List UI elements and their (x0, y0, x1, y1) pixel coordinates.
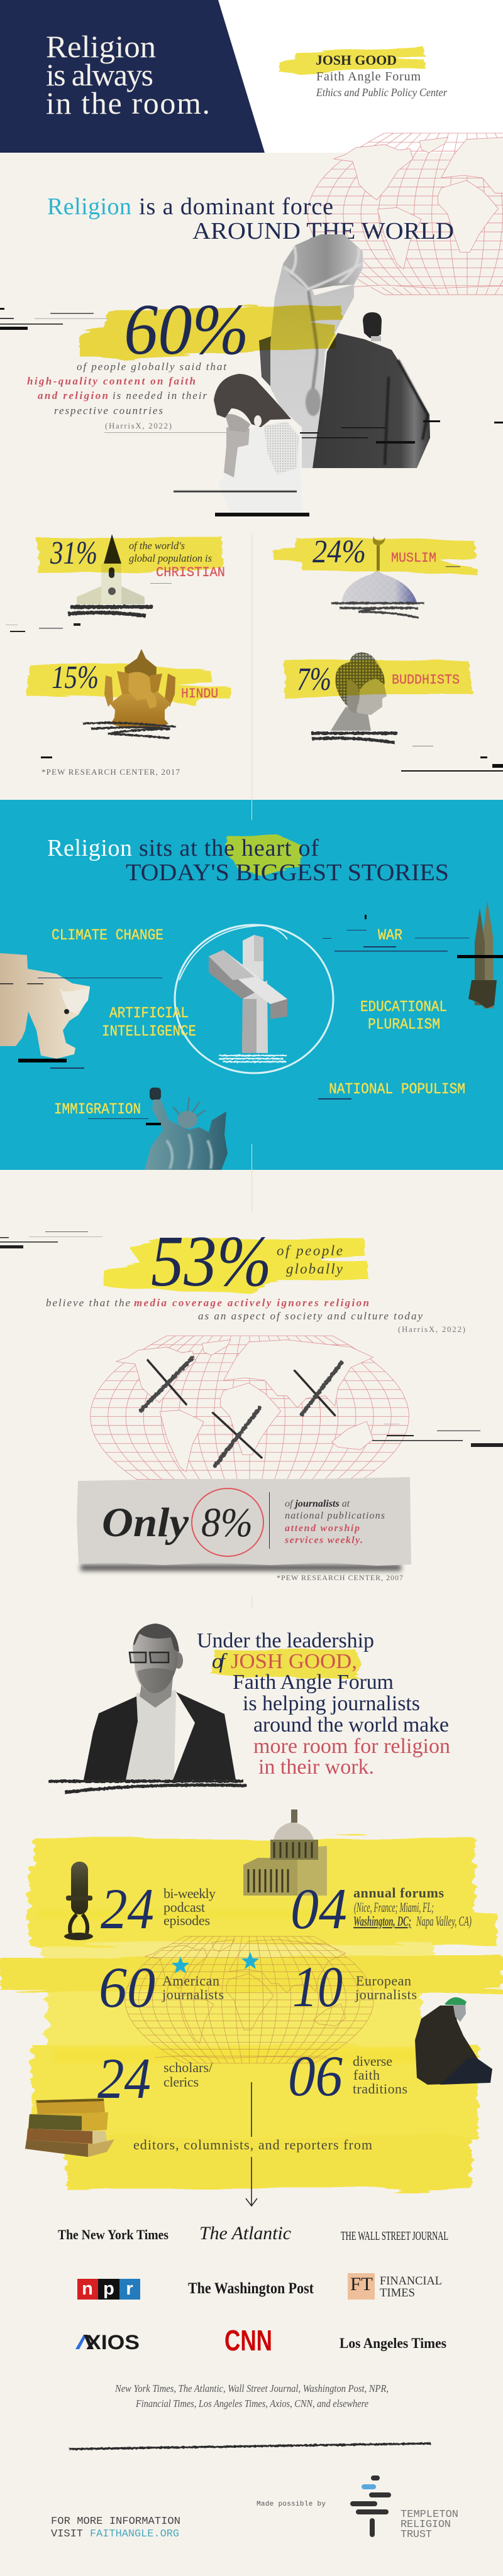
section heading: sits at the heart of (139, 835, 319, 861)
stat: scholars and clerics: 24 (97, 2046, 151, 2110)
60 percent stat: 60% (124, 290, 249, 370)
53 percent description: (HarrisX, 2022) (398, 1324, 465, 1334)
man's neck (371, 336, 381, 341)
main title: in the room. (46, 85, 210, 121)
main title (46, 29, 210, 121)
world map lower (125, 1936, 373, 2063)
ears (117, 671, 130, 694)
53 percent label: globally (286, 1261, 343, 1277)
outlet logos (58, 2223, 448, 2357)
face (340, 653, 387, 715)
templeton religion trust logo (350, 2475, 458, 2541)
leadership statement: JOSH GOOD, (231, 1650, 357, 1673)
hair (133, 1624, 179, 1652)
panel: muslim 24 percent (274, 534, 477, 618)
dome (274, 1822, 314, 1840)
the atlantic: The Atlantic (199, 2223, 291, 2244)
brush (274, 538, 477, 575)
neck (140, 1678, 173, 1708)
journalists text: services weekly. (284, 1535, 363, 1546)
green cap (445, 1997, 467, 2005)
story topics: WAR (378, 927, 402, 944)
portrait: Josh Good (48, 1624, 246, 1793)
new york times: The New York Times (58, 2227, 169, 2242)
face (225, 414, 250, 432)
drum (270, 1840, 318, 1860)
stat: annual forums: Washington, DC; (353, 1913, 411, 1929)
faith name: BUDDHISTS (392, 672, 460, 688)
world map top (308, 133, 503, 295)
stat: american journalists: American (162, 1973, 219, 1989)
stat: podcast episodes: 24 (101, 1877, 154, 1941)
face and trunk (128, 672, 157, 709)
legs (440, 2058, 492, 2085)
stat: american journalists (99, 1955, 224, 2019)
body (110, 691, 171, 728)
sweater (218, 421, 302, 513)
story topics: NATIONAL POPULISM (329, 1081, 465, 1098)
heading: dominant force: Religion (47, 194, 131, 220)
mosque dome (341, 536, 417, 604)
face (133, 1625, 178, 1693)
npr: r (126, 2279, 133, 2299)
leadership statement: of (212, 1650, 228, 1673)
paper shadow (80, 1564, 401, 1571)
ground scribble (331, 603, 424, 618)
53 percent label (277, 1243, 343, 1277)
60 percent description: is needed in their (113, 390, 207, 401)
story topics: EDUCATIONAL (360, 999, 447, 1016)
red circle (192, 1488, 263, 1556)
man's cap (363, 312, 382, 338)
central cross icon (175, 925, 333, 1073)
capitol building (243, 1809, 327, 1896)
stat: faith traditions: faith (353, 2067, 380, 2083)
neck base (331, 707, 371, 731)
hair (335, 652, 385, 707)
brush behind 60 percent (79, 305, 341, 361)
value: 24% (312, 534, 366, 570)
stars (172, 1952, 259, 1973)
hands raised (104, 675, 113, 707)
shirt (126, 1690, 176, 1780)
leadership statement: Under the leadership (197, 1629, 374, 1652)
heading: dominant force (47, 194, 454, 244)
faith name: HINDU (181, 686, 218, 702)
stat: podcast episodes: bi-weekly (163, 1886, 216, 1901)
los angeles times: Los Angeles Times (340, 2335, 446, 2351)
financial times (348, 2273, 442, 2300)
journalists text (284, 1498, 385, 1546)
church (77, 534, 145, 604)
footer: more information: VISIT (51, 2528, 83, 2540)
financial times: TIMES (380, 2286, 415, 2300)
heading: dominant force: AROUND THE WORLD (192, 218, 454, 244)
editors caption: editors, columnists, and reporters from (133, 2137, 372, 2153)
ground scribble (311, 733, 397, 743)
photo: praying woman (214, 374, 302, 513)
right wing (297, 1846, 327, 1896)
brush (26, 663, 231, 705)
arm and hands (224, 427, 250, 478)
leadership statement: in their work. (258, 1755, 374, 1779)
josh good highlight (211, 1649, 362, 1679)
axios: XIOS (86, 2331, 140, 2354)
label: global population is (129, 552, 212, 564)
footer: more information (51, 2516, 180, 2540)
outlets caption (114, 2382, 389, 2410)
value: 7% (297, 662, 331, 697)
beard shadow (137, 1668, 175, 1693)
face (453, 2003, 466, 2022)
53 percent stat: 53% (151, 1221, 272, 1302)
panel: buddhist 7 percent (283, 652, 473, 743)
60 percent description: (HarrisX, 2022) (105, 421, 172, 430)
lace panel (264, 422, 299, 474)
ground scribble (83, 723, 176, 738)
stat: faith traditions: 06 (288, 2044, 343, 2108)
source note: Pew 2017: *PEW RESEARCH CENTER, 2017 (41, 767, 180, 777)
8 percent: 8% (201, 1500, 253, 1546)
buddha head (331, 652, 387, 731)
heading: dominant force: is a dominant force (139, 194, 333, 220)
brush (283, 660, 473, 697)
earring (254, 415, 262, 427)
stat: scholars and clerics: clerics (163, 2074, 199, 2090)
stat: european journalists: journalists (355, 1987, 417, 2002)
stat: scholars and clerics: scholars/ (163, 2060, 213, 2075)
footer: more information: FOR MORE INFORMATION (51, 2516, 180, 2528)
praying man (415, 1997, 492, 2085)
polar bear (0, 953, 90, 1059)
npr: p (103, 2279, 114, 2299)
faith name: CHRISTIAN (156, 565, 225, 581)
hair (214, 374, 291, 427)
coat (415, 2006, 479, 2085)
washington post: The Washington Post (188, 2280, 314, 2297)
label (129, 540, 212, 564)
main title: is always (46, 57, 153, 92)
stat: annual forums (290, 1877, 472, 1941)
navy title block (0, 0, 265, 153)
author block: Ethics and Public Policy Center (316, 86, 448, 99)
jacket left (84, 1696, 138, 1780)
story topics: ARTIFICIAL (109, 1005, 189, 1022)
leadership statement (197, 1629, 450, 1779)
53 percent label: of people (277, 1243, 343, 1258)
base scribble (219, 1056, 287, 1062)
journalists text: attend worship (285, 1523, 360, 1534)
green highlight (225, 834, 302, 876)
leadership statement: is helping journalists (243, 1692, 420, 1715)
stack of books (25, 2098, 114, 2157)
dark robe (312, 333, 430, 468)
stat: faith traditions: traditions (353, 2081, 407, 2097)
outlets caption: New York Times, The Atlantic, Wall Street Journal, Washington Post, NPR, (114, 2382, 389, 2394)
leadership statement: Faith Angle Forum (233, 1671, 394, 1694)
stat: american journalists: 60 (99, 1955, 155, 2019)
value: 15% (52, 660, 99, 696)
story topics: PLURALISM (368, 1017, 440, 1034)
60 percent description (27, 361, 227, 430)
stat: european journalists (292, 1955, 417, 2019)
story topics (52, 927, 465, 1118)
author block: Faith Angle Forum (316, 70, 421, 84)
stat: annual forums: (Nice, France; Miami, FL; (354, 1899, 434, 1915)
header panel (0, 0, 503, 153)
panel: christian 31 percent (36, 534, 225, 616)
stat: faith traditions: diverse (353, 2053, 392, 2069)
label: of the world's (129, 540, 185, 552)
statue of liberty (145, 1088, 228, 1170)
left portico (243, 1858, 297, 1896)
panel: hindu 15 percent (26, 649, 231, 738)
author highlight brush (279, 46, 425, 75)
npr (77, 2279, 140, 2300)
ganesha statue (104, 649, 175, 728)
stat: european journalists: European (356, 1973, 411, 1989)
stat: podcast episodes: podcast (163, 1899, 205, 1915)
brush (36, 536, 223, 573)
journalists text: of journalists at (285, 1498, 350, 1509)
npr: n (82, 2279, 93, 2299)
stat: scholars and clerics (97, 2046, 213, 2110)
section heading: TODAY'S BIGGEST STORIES (126, 860, 449, 886)
section heading (47, 835, 449, 886)
glasses (130, 1652, 169, 1662)
ground scribble (48, 1781, 246, 1793)
stat: annual forums: 04 (290, 1877, 347, 1941)
stat: podcast episodes: episodes (163, 1913, 210, 1928)
stat: annual forums: annual forums (353, 1885, 444, 1901)
53 percent description: as an aspect of society and culture today (198, 1310, 423, 1322)
section heading: Religion (47, 835, 132, 861)
main title: Religion (46, 29, 156, 64)
60 percent description: respective countries (54, 405, 163, 417)
brush behind 53 percent (104, 1239, 368, 1294)
leadership statement: around the world make (253, 1713, 449, 1737)
60 percent description: of people globally said that (77, 361, 227, 373)
paper clipping panel (77, 1477, 411, 1571)
journalists text: national publications (285, 1510, 385, 1521)
footer: more information: FAITHANGLE.ORG (90, 2528, 179, 2540)
value: 31% (50, 535, 97, 571)
53 percent description: media coverage actively ignores religion (134, 1297, 369, 1309)
ground scribble (68, 607, 153, 616)
author block (316, 52, 448, 99)
teal background (0, 800, 503, 1170)
source note: Pew 2007: *PEW RESEARCH CENTER, 2007 (277, 1573, 403, 1582)
financial times: FT (350, 2274, 373, 2295)
templeton religion trust logo: TRUST (401, 2529, 432, 2541)
sketched circle (175, 925, 333, 1073)
story topics: CLIMATE CHANGE (52, 927, 163, 944)
panel: today's biggest stories (0, 800, 503, 1170)
microphone (64, 1862, 93, 1940)
outlets caption: Financial Times, Los Angeles Times, Axios, CNN, and elsewhere (135, 2398, 368, 2410)
arrow: from yellow panel to outlets (246, 2082, 257, 2206)
rockets (468, 900, 497, 1008)
photo: hijab figure and man in robe (259, 234, 430, 468)
story topics: IMMIGRATION (54, 1101, 141, 1118)
ear (347, 680, 360, 713)
jacket right (173, 1692, 236, 1780)
stat: podcast episodes (101, 1877, 216, 1941)
crown (124, 649, 157, 685)
world map middle (91, 1336, 409, 1497)
author block: JOSH GOOD (316, 52, 397, 68)
cloth drape (270, 246, 354, 468)
leadership statement: more room for religion (253, 1735, 450, 1758)
faith name: MUSLIM (391, 550, 436, 566)
stat: american journalists: journalists (162, 1987, 224, 2002)
60 percent description: and religion (38, 390, 108, 401)
torn paper (77, 1477, 411, 1566)
footer brush divider (69, 2443, 431, 2449)
templeton religion trust logo: TEMPLETON (401, 2509, 458, 2521)
stat: faith traditions (288, 2044, 407, 2108)
head wrap (283, 234, 363, 290)
60 percent description: high-quality content on faith (27, 375, 196, 387)
53 percent description: believe that the (46, 1297, 130, 1309)
story topics: INTELLIGENCE (102, 1023, 196, 1040)
templeton religion trust logo: RELIGION (401, 2519, 451, 2531)
x marks on map (141, 1358, 341, 1466)
made possible by: Made possible by (257, 2501, 326, 2508)
financial times: FINANCIAL (380, 2274, 442, 2288)
left dark sleeve (259, 336, 272, 388)
only text: Only (102, 1500, 189, 1546)
large yellow brush panel (0, 1838, 503, 2189)
53 percent description (46, 1297, 465, 1334)
ear (174, 1652, 183, 1669)
cnn: CNN (224, 2324, 272, 2357)
stat: european journalists: 10 (292, 1955, 343, 2019)
